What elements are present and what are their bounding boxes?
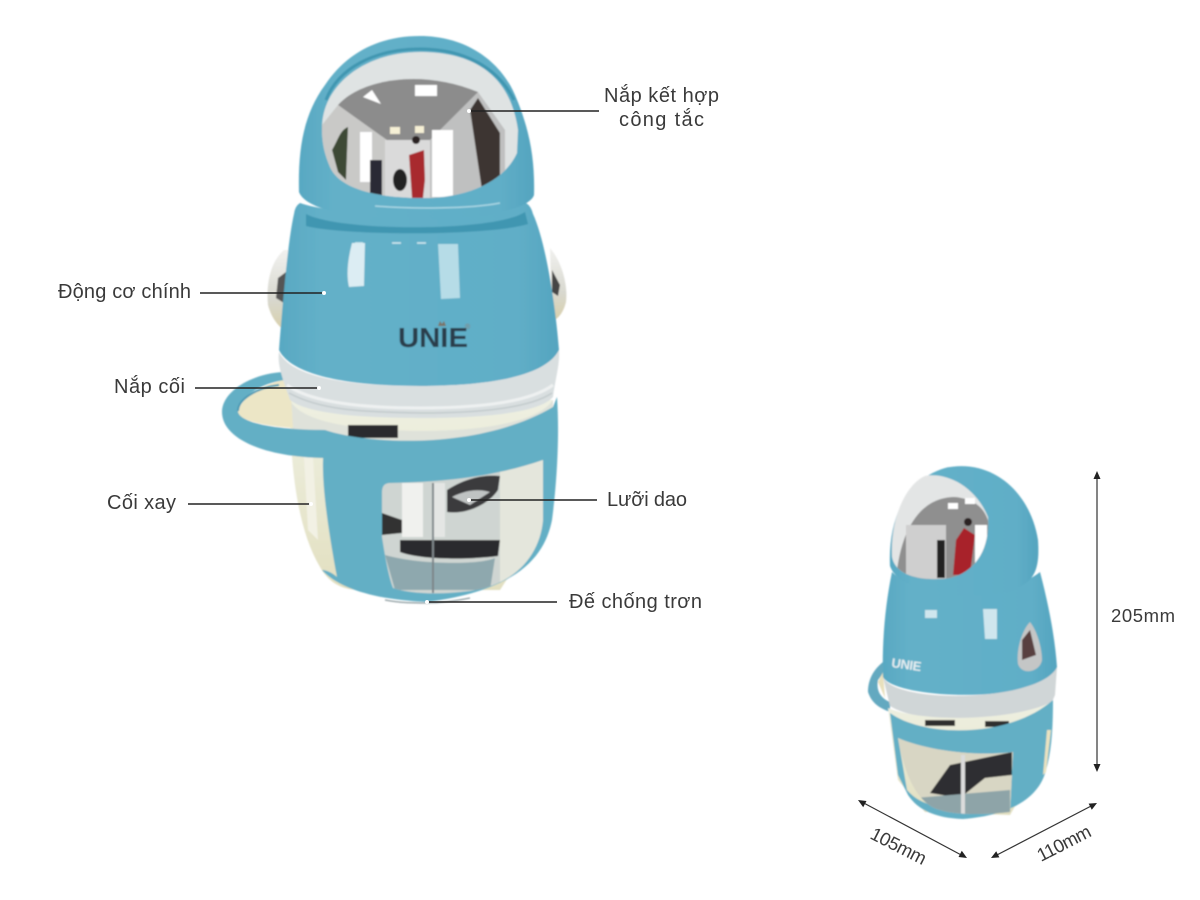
lid ring (279, 350, 559, 418)
right wall (430, 92, 505, 198)
product: large blender with parts (222, 36, 566, 603)
egg button (1018, 622, 1042, 671)
label: Nắp kết hợp công tắc: Nắp kết hợp (604, 84, 719, 107)
left wall (322, 105, 387, 198)
dimension: height 205mm (1094, 471, 1175, 772)
motor body (279, 203, 559, 386)
label: Đế chống trơn (425, 591, 702, 613)
label: Nắp kết hợp công tắc: công tắc (619, 108, 704, 131)
label: Cối xay: Cối xay (107, 492, 176, 514)
highlights (348, 243, 365, 287)
ceiling (338, 79, 478, 140)
plant (332, 127, 348, 180)
chair (393, 169, 407, 191)
back wall (385, 140, 429, 196)
handle (868, 662, 890, 712)
right ear chrome (550, 248, 566, 322)
window (898, 738, 1014, 815)
jar (290, 400, 553, 590)
label: Lưỡi dao (467, 489, 687, 511)
dimension: width 110mm (991, 803, 1097, 866)
dimension: width 110mm: 110mm (1033, 821, 1094, 866)
label: Lưỡi dao: Lưỡi dao (607, 489, 687, 511)
dark band under head (306, 212, 528, 233)
product: small blender with dimensions (868, 466, 1057, 819)
dimension: depth 105mm: 105mm (867, 823, 930, 869)
door (470, 98, 500, 190)
body (883, 572, 1057, 695)
label: Cối xay (107, 492, 313, 514)
frame window (381, 459, 544, 594)
ceiling lights (363, 90, 381, 104)
head (890, 466, 1038, 595)
label: Nắp kết hợp công tắc (467, 84, 719, 131)
UNIE logo: ® (465, 323, 471, 331)
dimension: depth 105mm (858, 800, 967, 869)
label: Nắp cối: Nắp cối (114, 375, 185, 398)
jar (888, 702, 1052, 815)
chrome visor (318, 48, 523, 203)
label: Động cơ chính: Động cơ chính (58, 281, 191, 303)
UNIE small logo: UNIE (891, 655, 923, 674)
visor (888, 470, 992, 582)
handle ring (222, 372, 335, 458)
UNIE logo: UNIE (398, 322, 468, 353)
windows (360, 132, 372, 182)
lid (883, 667, 1057, 720)
left ear chrome (268, 250, 292, 332)
person (412, 136, 420, 144)
frame (890, 700, 1053, 819)
screen (370, 160, 382, 196)
label: Động cơ chính (58, 281, 326, 303)
dimension: height 205mm: 205mm (1111, 605, 1175, 626)
base frame (322, 397, 558, 602)
label: Đế chống trơn: Đế chống trơn (569, 591, 702, 613)
label: Nắp cối (114, 375, 321, 398)
head (299, 36, 534, 219)
